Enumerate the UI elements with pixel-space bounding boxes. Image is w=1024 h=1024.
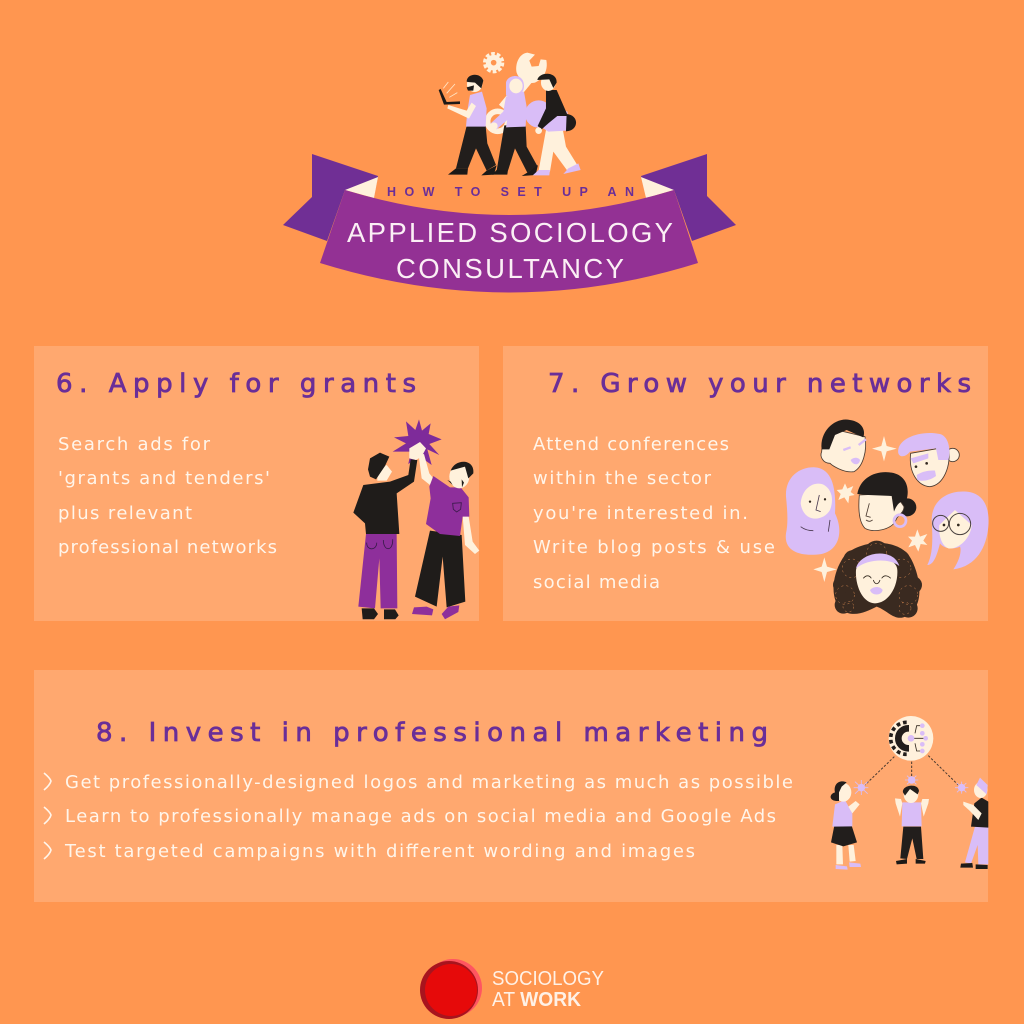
face: hijab <box>786 467 839 555</box>
face: curly hair <box>833 541 922 618</box>
title line 2: CONSULTANCY <box>396 253 624 284</box>
text block: networking advice: social media <box>533 572 660 593</box>
banner: left fold <box>345 177 378 198</box>
panel: grow your networks <box>503 346 989 621</box>
panel: invest in professional marketing <box>34 670 988 902</box>
face: short dark hair <box>821 419 866 472</box>
icon: wrench <box>488 53 547 131</box>
banner: back ribbon left <box>283 154 378 241</box>
panel: apply for grants <box>34 346 479 621</box>
text block: networking advice: Attend conferences <box>533 434 729 455</box>
bullet list: marketing advice: Test targeted campaigns with different wording and images <box>64 841 695 862</box>
banner: right fold <box>641 177 674 198</box>
title line 1: APPLIED SOCIOLOGY <box>347 217 673 248</box>
heading: step 6: 6. Apply for grants <box>56 369 416 399</box>
bullet list: marketing advice: Get professionally-designed logos and marketing as much as possible <box>65 772 793 793</box>
person in hijab <box>490 76 538 176</box>
banner: front ribbon <box>320 190 698 292</box>
logo text: AT WORK <box>492 989 582 1011</box>
icon: gear <box>485 54 503 72</box>
icon: sparkle <box>813 557 837 582</box>
logo text: SOCIOLOGY <box>492 968 604 990</box>
person: centre man <box>895 786 929 864</box>
person: left woman <box>831 781 861 870</box>
text block: grants advice: professional networks <box>58 537 277 558</box>
text block: grants advice: 'grants and tenders' <box>58 468 270 489</box>
connectors: dashed lines <box>865 756 958 785</box>
text block: networking advice: you're interested in. <box>533 503 748 524</box>
illustration: marketing network <box>831 716 988 870</box>
face: glasses and lilac hair <box>927 491 989 569</box>
icon: sunbursts <box>854 776 968 795</box>
icon: sparkle burst <box>837 483 855 503</box>
icon: gear and node badge <box>889 716 933 761</box>
face: centre with bun and earring <box>857 472 916 531</box>
person: front view <box>412 454 479 619</box>
text block: networking advice: Write blog posts & use <box>533 537 775 558</box>
person: right man <box>960 778 988 869</box>
icon: sparkle burst <box>908 529 927 552</box>
text block: grants advice: Search ads for <box>58 434 211 455</box>
banner: back ribbon right <box>641 154 736 241</box>
bullet list: marketing advice <box>44 772 793 862</box>
heading: step 7: 7. Grow your networks <box>548 369 971 399</box>
illustration: two people high-fiving <box>353 419 479 619</box>
text block: networking advice <box>533 434 775 593</box>
text block: grants advice <box>58 434 277 558</box>
face: lilac hair and moustache <box>898 433 959 487</box>
logo text <box>492 968 604 1011</box>
icon: purple starburst <box>393 419 442 465</box>
illustration: group of faces <box>786 419 989 618</box>
heading: step 8: 8. Invest in professional marketing <box>96 718 768 748</box>
icon: sparkle <box>872 436 897 461</box>
person with laptop <box>439 75 497 175</box>
bullet list: marketing advice: Learn to professionally manage ads on social media and Google Ads <box>65 806 776 827</box>
illustration: three people carrying tools <box>439 53 581 176</box>
text block: networking advice: within the sector <box>533 468 712 489</box>
person carrying light bulb <box>525 74 581 175</box>
person: back view <box>353 442 426 619</box>
icon: red circle mark <box>420 959 482 1019</box>
subtitle: HOW TO SET UP AN <box>387 185 634 199</box>
text block: grants advice: plus relevant <box>58 503 192 524</box>
logo: Sociology at Work <box>420 959 604 1019</box>
